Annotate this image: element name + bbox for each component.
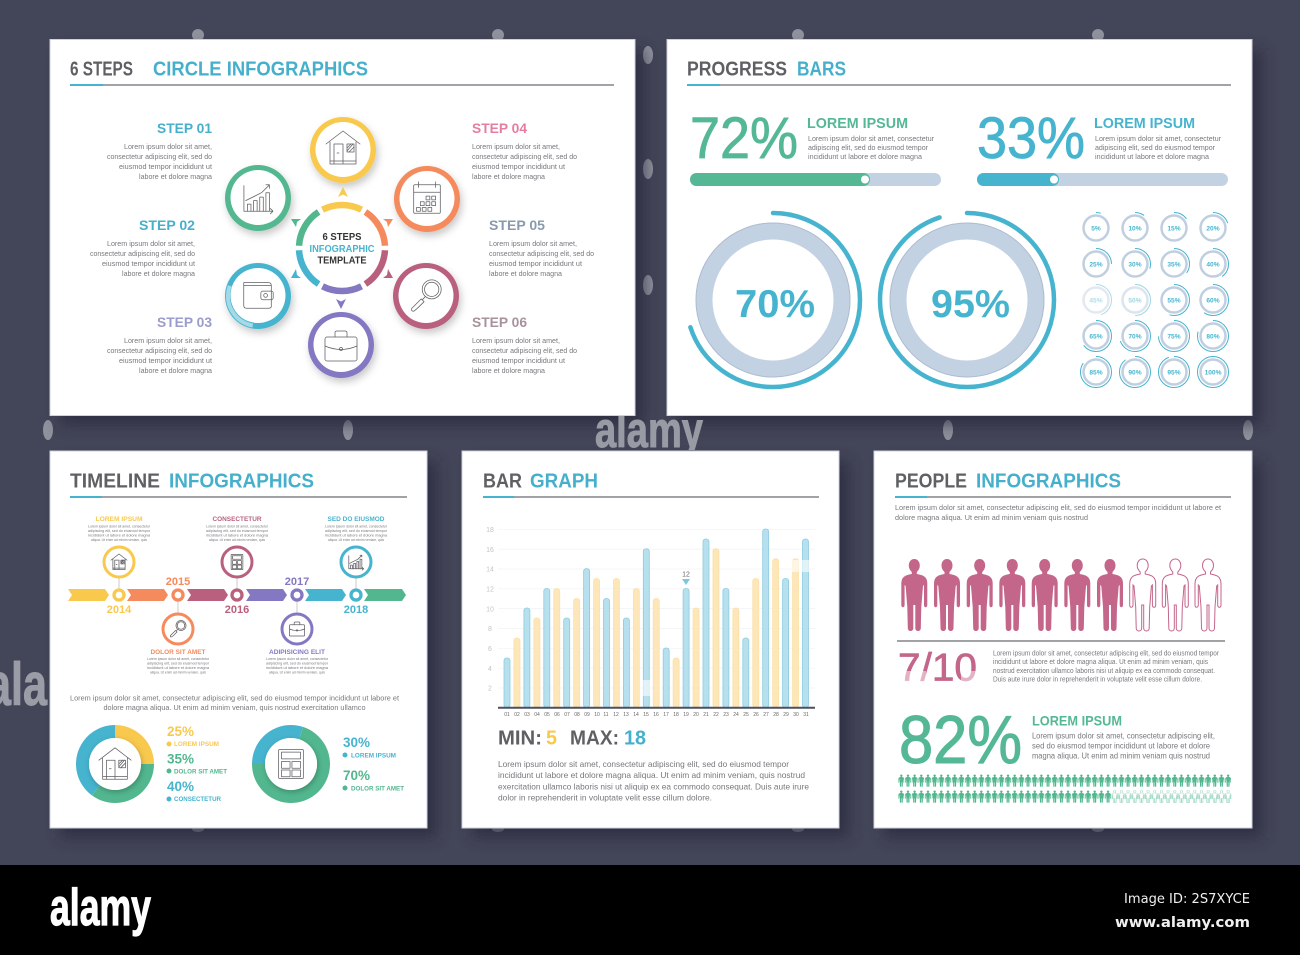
text: step 04: Lorem ipsum dolor sit amet, <box>472 142 560 151</box>
marker: value 12 <box>682 572 690 585</box>
x axis labels: 02 <box>514 712 520 718</box>
years <box>107 576 368 616</box>
y axis labels: 18 <box>486 527 494 534</box>
text: bar graph description: incididunt ut labore et dolore magna aliqua. Ut enim ad minim veniam, quis nostrud <box>498 771 805 780</box>
x axis labels: 07 <box>564 712 570 718</box>
x axis labels: 14 <box>633 712 639 718</box>
text: 7/10 description: Duis aute irure dolor in reprehenderit in voluptate velit esse cillum dolore. <box>993 677 1202 684</box>
watermark glints on bars <box>642 560 809 696</box>
heading: circle infographics: CIRCLE INFOGRAPHICS <box>153 58 368 80</box>
text: step 04: labore et dolore magna <box>472 172 545 181</box>
icon: timeline chart <box>341 547 371 577</box>
text: bar graph description: exercitation ullamco laboris nisi ut aliquip ex ea commodo consequat. Duis aute irure <box>498 782 809 792</box>
icon: timeline magnifier <box>163 614 193 644</box>
heading: bar graph: GRAPH <box>530 471 598 493</box>
text: consectetur milestone <box>206 516 269 542</box>
x axis labels <box>504 712 809 718</box>
panel: people infographics <box>874 451 1252 828</box>
radial grid: 5% to 100%: 60% <box>1206 298 1220 304</box>
radial: 95% <box>880 213 1054 387</box>
text: sed do eiusmod milestone: Lorem ipsum dolor sit amet, consectetur <box>325 524 388 528</box>
stat: 33%: adipiscing elit, sed do eiusmod tempor <box>1095 143 1216 152</box>
stat: 82%: 82% <box>899 702 1022 778</box>
timeline nodes <box>114 590 361 600</box>
text: dolor sit amet milestone: Lorem ipsum dolor sit amet, consectetur <box>147 657 210 661</box>
text: consectetur milestone: aliqua. Ut enim ad minim veniam, quis <box>209 538 265 542</box>
centre watermark: alamy <box>595 402 703 458</box>
x axis labels: 12 <box>613 712 619 718</box>
text: sed do eiusmod milestone: SED DO EIUSMOD <box>328 516 385 523</box>
legend: donut one: CONSECTETUR <box>174 796 221 803</box>
y axis labels: 2 <box>488 686 492 692</box>
text: sed do eiusmod milestone <box>325 516 388 542</box>
text: timeline description: Lorem ipsum dolor sit amet, consectetur adipiscing elit, sed do eiusmod tempor incididunt ut labore et <box>70 694 399 702</box>
text: step 01: STEP 01 <box>157 120 212 136</box>
stat: 72%: incididunt ut labore et dolore magna <box>808 152 922 161</box>
text: dolor sit amet milestone: incididunt ut labore et dolore magna <box>147 666 210 670</box>
text: step 02: STEP 02 <box>139 217 195 233</box>
radial grid: 5% to 100%: 100% <box>1205 370 1222 376</box>
panel: 6 steps circle infographics <box>50 40 635 416</box>
text: bar graph description: dolor in reprehenderit in voluptate velit esse cillum dolore. <box>498 794 712 802</box>
text: step 05 <box>489 217 594 278</box>
text: dolor sit amet milestone: adipiscing elit, sed do eiusmod tempor <box>147 662 210 666</box>
text: 82% description: LOREM IPSUM <box>1032 713 1122 729</box>
radial grid: 5% to 100%: 75% <box>1167 334 1181 340</box>
centre label: TEMPLATE <box>318 256 367 266</box>
text: step 06: labore et dolore magna <box>472 366 545 375</box>
x axis labels: 20 <box>693 712 699 718</box>
stat: 72%: LOREM IPSUM <box>807 115 908 132</box>
text: adipisicing elit milestone: incididunt ut labore et dolore magna <box>266 666 329 670</box>
text: step 02: consectetur adipiscing elit, sed do <box>90 249 195 258</box>
text: step 06: consectetur adipiscing elit, sed do <box>472 346 577 355</box>
bars <box>504 529 808 708</box>
heading: circle infographics: 6 STEPS <box>70 58 133 80</box>
radial grid: 5% to 100%: 65% <box>1089 334 1103 340</box>
text: lorem ipsum milestone: Lorem ipsum dolor sit amet, consectetur <box>88 524 151 528</box>
stat: 72%: adipiscing elit, sed do eiusmod tempor <box>808 143 929 152</box>
text: step 04: consectetur adipiscing elit, sed do <box>472 152 577 161</box>
x axis labels: 26 <box>753 712 759 718</box>
connector lines <box>119 578 356 613</box>
centre label: 6 STEPS <box>322 232 362 243</box>
text: sed do eiusmod milestone: incididunt ut labore et dolore magna <box>325 534 388 538</box>
text: step 02: labore et dolore magna <box>122 269 195 278</box>
text: consectetur milestone: Lorem ipsum dolor sit amet, consectetur <box>206 524 269 528</box>
heading: bar graph <box>483 471 819 497</box>
progress bar: 33% <box>977 173 1228 186</box>
text: step 01: Lorem ipsum dolor sit amet, <box>124 142 212 151</box>
icon: timeline briefcase <box>282 614 312 644</box>
pictogram: 82 of 100 people <box>898 774 1231 803</box>
text: step 04: eiusmod tempor incididunt ut <box>472 162 565 171</box>
text: 7/10 description: Lorem ipsum dolor sit amet, consectetur adipiscing elit, sed do eiusmod tempor <box>993 650 1220 658</box>
text: step 06: eiusmod tempor incididunt ut <box>472 356 565 365</box>
stat: 33%: 33% <box>977 106 1085 171</box>
text: step 03: STEP 03 <box>157 314 212 330</box>
text: 7/10 description <box>993 650 1220 684</box>
text: step 06: STEP 06 <box>472 314 527 330</box>
legend: donut one: LOREM IPSUM <box>174 741 219 748</box>
footer url: www.alamy.com <box>1115 915 1250 931</box>
text: people intro <box>895 503 1221 522</box>
x axis labels: 08 <box>574 712 580 718</box>
min max values: 18 <box>624 728 646 750</box>
text: step 05: consectetur adipiscing elit, sed do <box>489 249 594 258</box>
x axis labels: 23 <box>723 712 729 718</box>
panel: timeline infographics <box>50 451 427 828</box>
x axis labels: 30 <box>793 712 799 718</box>
heading: timeline infographics <box>70 471 407 497</box>
x axis labels: 05 <box>544 712 550 718</box>
footer image id: Image ID: 2S7XYCE <box>1124 891 1250 907</box>
stat: 72% <box>690 106 935 171</box>
radial grid: 5% to 100%: 90% <box>1128 370 1142 376</box>
y axis labels <box>486 527 494 692</box>
radial: 70% <box>686 213 860 387</box>
legend: donut two: LOREM IPSUM <box>351 752 396 760</box>
radial grid: 5% to 100%: 40% <box>1206 262 1220 268</box>
radial grid: 5% to 100%: 85% <box>1089 370 1103 376</box>
text: timeline description <box>70 694 399 712</box>
x axis labels: 09 <box>584 712 590 718</box>
radial grid: 5% to 100%: 45% <box>1089 298 1103 304</box>
stat: 33%: incididunt ut labore et dolore magna <box>1095 152 1209 161</box>
years: 2017 <box>285 576 309 588</box>
pictogram: 7 of 10 people <box>901 559 1221 631</box>
min max values: 5 <box>546 728 557 750</box>
icon: calendar circle <box>394 166 460 232</box>
text: step 04 <box>472 120 577 181</box>
text: lorem ipsum milestone: aliqua. Ut enim ad minim veniam, quis <box>91 538 147 542</box>
text: dolor sit amet milestone <box>147 649 210 674</box>
y axis labels: 12 <box>486 586 494 594</box>
text: step 01: labore et dolore magna <box>139 172 212 181</box>
x axis labels: 22 <box>713 712 719 718</box>
text: timeline description: dolore magna aliqua. Ut enim ad minim veniam, quis nostrud exercitation ullamco <box>104 703 366 712</box>
text: adipisicing elit milestone: ADIPISICING ELIT <box>269 649 325 656</box>
panel: bar graph <box>462 451 839 828</box>
donut chart: 30 70 <box>250 723 332 805</box>
text: consectetur milestone: incididunt ut labore et dolore magna <box>206 534 269 538</box>
radial grid: 5% to 100% <box>1080 212 1228 388</box>
text: step 04: STEP 04 <box>472 120 527 136</box>
heading: people infographics: PEOPLE <box>895 471 967 493</box>
text: step 05: labore et dolore magna <box>489 269 562 278</box>
y axis labels: 10 <box>486 606 494 614</box>
x axis labels: 18 <box>673 712 679 718</box>
x axis labels: 25 <box>743 712 749 718</box>
radial grid: 5% to 100%: 10% <box>1128 226 1142 232</box>
panel: progress bars <box>667 40 1252 416</box>
x axis labels: 28 <box>773 712 779 718</box>
icon: timeline house <box>104 547 134 577</box>
years: 2016 <box>225 604 249 616</box>
x axis labels: 29 <box>783 712 789 718</box>
legend: donut one: 25% <box>167 724 194 739</box>
text: consectetur milestone: adipiscing elit, sed do eiusmod tempor <box>206 529 269 533</box>
text: sed do eiusmod milestone: adipiscing elit, sed do eiusmod tempor <box>325 529 388 533</box>
text: step 03: labore et dolore magna <box>139 366 212 375</box>
text: step 02: eiusmod tempor incididunt ut <box>102 259 195 268</box>
min max values <box>498 728 646 750</box>
text: step 03: eiusmod tempor incididunt ut <box>119 356 212 365</box>
x axis labels: 03 <box>524 712 530 718</box>
x axis labels: 11 <box>603 712 609 718</box>
radial grid: 5% to 100%: 95% <box>1167 370 1181 376</box>
text: bar graph description <box>498 760 809 802</box>
arrows around centre <box>291 187 393 309</box>
stat: 72%: 72% <box>690 106 798 171</box>
x axis labels: 15 <box>643 712 649 718</box>
y axis labels: 8 <box>488 626 492 633</box>
legend: donut one: 40% <box>167 779 194 794</box>
heading: people infographics: INFOGRAPHICS <box>976 471 1121 493</box>
text: step 01 <box>107 120 212 181</box>
text: step 02 <box>90 217 195 278</box>
stat: 33%: LOREM IPSUM <box>1094 115 1195 132</box>
text: step 05: eiusmod tempor incididunt ut <box>489 259 582 268</box>
radial grid: 5% to 100%: 20% <box>1206 226 1220 232</box>
panel shadows <box>60 50 1262 838</box>
legend: donut two: 30% <box>343 735 370 750</box>
text: lorem ipsum milestone: incididunt ut labore et dolore magna <box>88 534 151 538</box>
footer logo: alamy <box>50 879 151 937</box>
radial grid: 5% to 100%: 50% <box>1128 298 1142 304</box>
text: 82% description: Lorem ipsum dolor sit amet, consectetur adipiscing elit, <box>1032 732 1215 740</box>
text: bar graph description: Lorem ipsum dolor sit amet, consectetur adipiscing elit, sed do eiusmod tempor <box>498 760 789 769</box>
text: dolor sit amet milestone: aliqua. Ut enim ad minim veniam, quis <box>150 670 206 674</box>
legend: donut one <box>166 724 227 803</box>
centre label: INFOGRAPHIC <box>310 244 374 255</box>
text: lorem ipsum milestone: LOREM IPSUM <box>96 516 142 523</box>
stat: 7/10: 7/10 <box>898 647 977 690</box>
radial grid: 5% to 100%: 30% <box>1128 262 1142 268</box>
text: consectetur milestone: CONSECTETUR <box>212 516 262 523</box>
centre ring segments <box>283 189 401 307</box>
legend: donut one: 35% <box>167 752 194 766</box>
radial grid: 5% to 100%: 5% <box>1091 226 1101 232</box>
y axis labels: 16 <box>486 547 494 554</box>
text: lorem ipsum milestone <box>88 516 151 542</box>
x axis labels: 24 <box>733 712 739 718</box>
icon: wallet circle <box>223 261 293 331</box>
text: lorem ipsum milestone: adipiscing elit, sed do eiusmod tempor <box>88 529 151 533</box>
text: 82% description <box>1032 713 1215 760</box>
stat: 72%: Lorem ipsum dolor sit amet, consectetur <box>808 134 935 143</box>
text: step 03 <box>107 314 212 375</box>
text: dolor sit amet milestone: DOLOR SIT AMET <box>150 649 206 656</box>
heading: progress bars: PROGRESS <box>687 58 787 80</box>
legend: donut one: DOLOR SIT AMET <box>174 768 227 776</box>
x axis labels: 27 <box>763 712 769 718</box>
text: step 06: Lorem ipsum dolor sit amet, <box>472 336 560 345</box>
min max values: MIN: <box>498 728 542 750</box>
stat: 33% <box>977 106 1222 171</box>
y axis labels: 4 <box>488 666 492 673</box>
text: 82% description: sed do eiusmod tempor incididunt ut labore et dolore <box>1032 742 1211 750</box>
legend: donut two: 70% <box>343 768 370 783</box>
text: step 06 <box>472 314 577 375</box>
y axis labels: 6 <box>488 646 492 653</box>
text: step 01: eiusmod tempor incididunt ut <box>119 162 212 171</box>
heading: timeline infographics: TIMELINE <box>70 471 160 493</box>
text: adipisicing elit milestone: Lorem ipsum dolor sit amet, consectetur <box>266 657 329 661</box>
donut chart: 25 35 40 <box>70 719 160 809</box>
timeline arrows <box>68 589 406 601</box>
x axis labels: 19 <box>683 712 689 718</box>
radial grid: 5% to 100%: 55% <box>1167 298 1181 304</box>
icon: magnifier circle <box>393 263 459 329</box>
x axis labels: 10 <box>594 712 600 718</box>
x axis labels: 06 <box>554 712 560 718</box>
heading: progress bars <box>687 58 1231 85</box>
text: people intro: Lorem ipsum dolor sit amet, consectetur adipiscing elit, sed do eiusmod tempor incididunt ut labore et <box>895 503 1221 512</box>
x axis labels: 31 <box>803 712 809 718</box>
text: step 02: Lorem ipsum dolor sit amet, <box>107 239 195 248</box>
x axis labels: 01 <box>504 712 510 718</box>
radial grid: 5% to 100%: 80% <box>1206 334 1220 340</box>
radial grid: 5% to 100%: 70% <box>1128 334 1142 340</box>
min max values: MAX: <box>570 728 619 750</box>
text: step 05: STEP 05 <box>489 217 545 233</box>
text: step 01: consectetur adipiscing elit, sed do <box>107 152 212 161</box>
icon: house circle <box>310 117 376 183</box>
x axis labels: 16 <box>653 712 659 718</box>
watermark fragments <box>43 29 1253 832</box>
years: 2014 <box>107 604 132 616</box>
stat: 33%: Lorem ipsum dolor sit amet, consectetur <box>1095 134 1222 143</box>
text: step 03: consectetur adipiscing elit, sed do <box>107 346 212 355</box>
x axis labels: 13 <box>623 712 629 718</box>
x axis labels: 17 <box>663 712 669 718</box>
x axis labels: 21 <box>703 712 709 718</box>
progress bar: 72% <box>690 173 941 186</box>
text: step 05: Lorem ipsum dolor sit amet, <box>489 239 577 248</box>
icon: briefcase circle <box>308 312 374 378</box>
text: step 03: Lorem ipsum dolor sit amet, <box>124 336 212 345</box>
text: sed do eiusmod milestone: aliqua. Ut enim ad minim veniam, quis <box>328 538 384 542</box>
text: adipisicing elit milestone: adipiscing elit, sed do eiusmod tempor <box>266 662 329 666</box>
text: 82% description: magna aliqua. Ut enim ad minim veniam quis nostrud <box>1032 752 1210 760</box>
heading: progress bars: BARS <box>797 58 846 80</box>
text: adipisicing elit milestone <box>266 649 329 674</box>
text: 7/10 description: nostrud exercitation ullamco laboris nisi ut aliquip ex ea commodo consequat. <box>993 668 1215 675</box>
marker: value 12: 12 <box>682 572 690 578</box>
heading: bar graph: BAR <box>483 471 522 493</box>
legend: donut two <box>342 735 404 792</box>
radial grid: 5% to 100%: 15% <box>1167 226 1181 232</box>
heading: people infographics <box>895 471 1231 497</box>
radial: 95%: 95% <box>931 283 1010 326</box>
years: 2015 <box>166 576 190 588</box>
heading: timeline infographics: INFOGRAPHICS <box>169 471 314 493</box>
bar chart <box>486 527 815 718</box>
radial grid: 5% to 100%: 35% <box>1167 262 1181 268</box>
text: 7/10 description: incididunt ut labore et dolore magna aliqua. Ut enim ad minim veniam, quis <box>993 659 1208 666</box>
text: adipisicing elit milestone: aliqua. Ut enim ad minim veniam, quis <box>269 670 325 674</box>
radial: 70%: 70% <box>735 283 815 326</box>
x axis labels: 04 <box>534 712 540 718</box>
legend: donut two: DOLOR SIT AMET <box>351 786 404 792</box>
icon: timeline calculator <box>222 547 252 577</box>
radial grid: 5% to 100%: 25% <box>1089 262 1103 268</box>
years: 2018 <box>344 604 368 616</box>
text: people intro: dolore magna aliqua. Ut enim ad minim veniam quis nostrud <box>895 513 1088 522</box>
centre label <box>310 232 374 266</box>
footer bar <box>0 865 1300 955</box>
heading: circle infographics <box>70 58 614 85</box>
icon: chart circle <box>225 165 291 231</box>
y axis labels: 14 <box>486 566 494 574</box>
